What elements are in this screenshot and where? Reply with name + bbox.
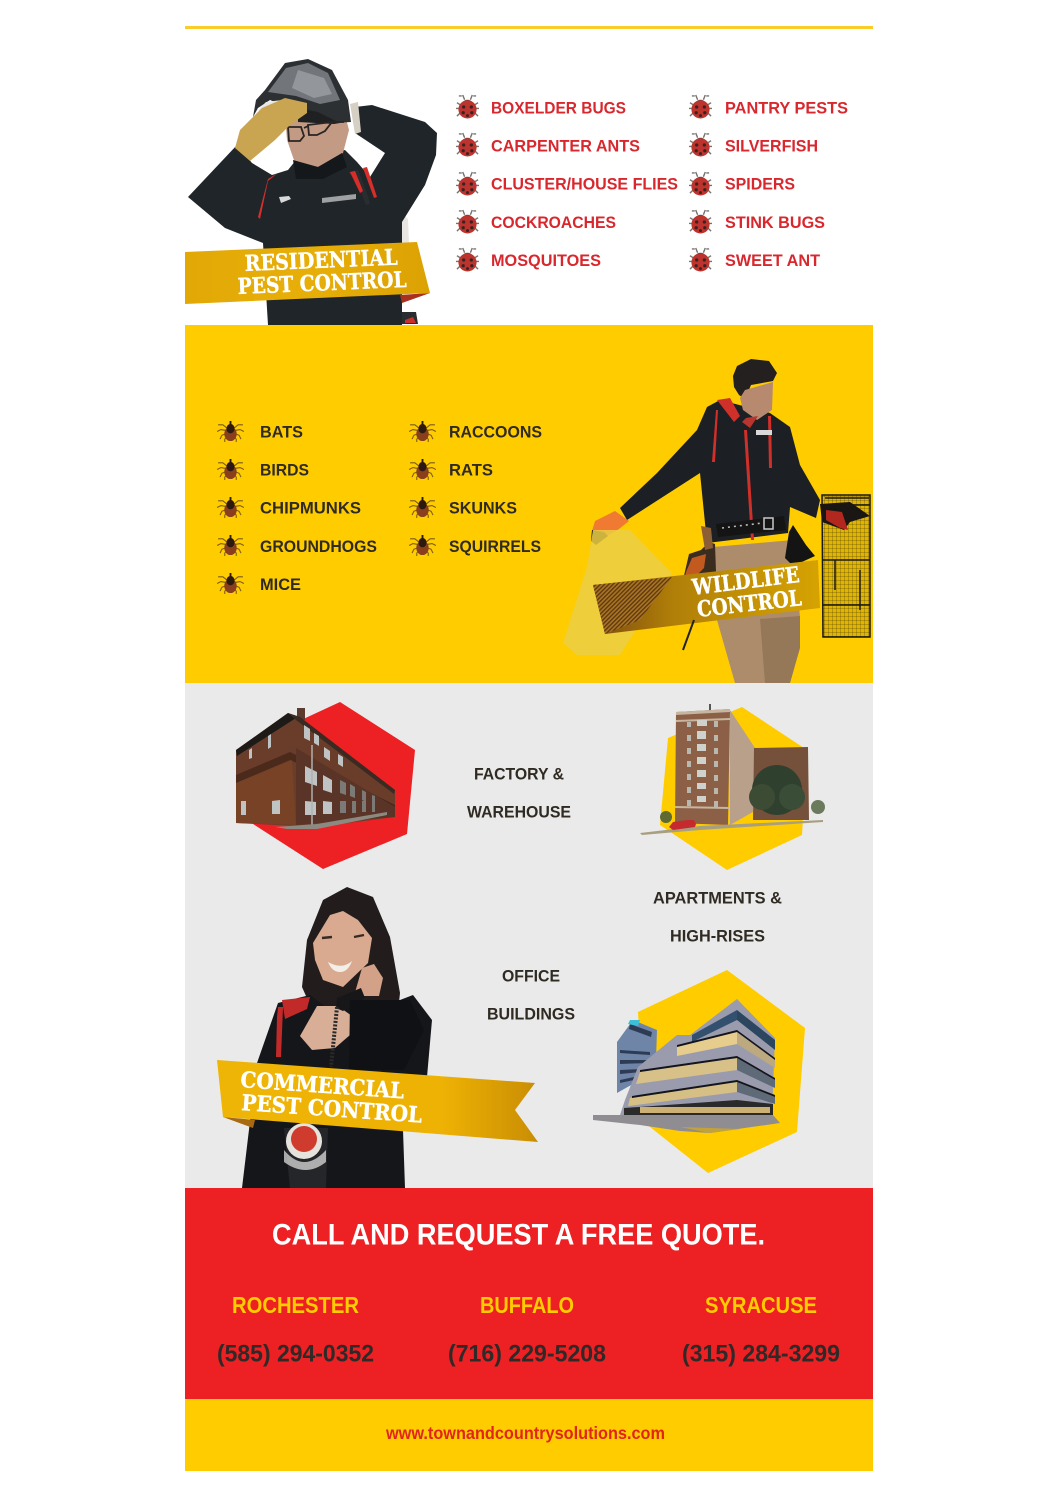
item: sweet ant — [689, 248, 821, 271]
item: stink bugs: STINK BUGS — [725, 213, 825, 232]
item: birds — [217, 459, 309, 480]
image: office building — [593, 999, 780, 1133]
label: apartments and high-rises: APARTMENTS & — [653, 888, 782, 908]
contact: buffalo — [448, 1292, 606, 1368]
ribbon: commercial pest control: COMMERCIAL — [240, 1067, 405, 1104]
item: pantry pests: PANTRY PESTS — [725, 98, 848, 118]
contact: rochester: (585) 294-0352 — [217, 1340, 374, 1368]
item: rats: RATS — [449, 460, 493, 480]
item: raccoons: RACCOONS — [449, 422, 542, 442]
ribbon: wildlife control: WILDLIFE — [690, 562, 801, 601]
item: cockroaches: COCKROACHES — [491, 213, 616, 232]
ribbon: commercial pest control: PEST CONTROL — [241, 1090, 423, 1129]
ribbon: residential pest control: PEST CONTROL — [237, 267, 407, 300]
label: office buildings: BUILDINGS — [487, 1004, 575, 1024]
panel: commercial pest control background — [185, 683, 873, 1188]
item: boxelder bugs — [456, 95, 626, 118]
item: stink bugs — [689, 210, 825, 233]
label: factory and warehouse: WAREHOUSE — [467, 802, 571, 822]
ribbon: commercial pest control — [217, 1060, 538, 1142]
photo: woman on telephone — [242, 887, 432, 1188]
item: pantry pests — [689, 95, 848, 118]
item: mosquitoes — [456, 248, 601, 271]
label: apartments and high-rises — [653, 888, 782, 946]
pest list: left column — [456, 95, 678, 271]
contact: rochester — [217, 1292, 374, 1368]
contact: syracuse: SYRACUSE — [705, 1292, 817, 1318]
photo: technician with visor — [188, 59, 437, 325]
wildlife list: left column — [217, 421, 377, 594]
ribbon: wildlife control: CONTROL — [696, 585, 803, 623]
item: cluster/house flies: CLUSTER/HOUSE FLIES — [491, 174, 678, 194]
item: chipmunks — [217, 497, 361, 518]
label: factory and warehouse — [467, 764, 571, 822]
top rule — [185, 26, 873, 29]
ribbon: residential pest control: RESIDENTIAL — [244, 245, 398, 277]
item: squirrels: SQUIRRELS — [449, 537, 541, 556]
label: office buildings — [487, 966, 575, 1024]
item: spiders — [689, 172, 795, 195]
item: bats — [217, 421, 303, 442]
heading: call and request a free quote: CALL AND REQUEST A FREE QUOTE. — [272, 1218, 765, 1252]
item: groundhogs: GROUNDHOGS — [260, 537, 377, 556]
label: apartments and high-rises: HIGH-RISES — [670, 926, 765, 946]
item: cluster/house flies — [456, 172, 678, 195]
item: silverfish: SILVERFISH — [725, 136, 818, 156]
item: spiders: SPIDERS — [725, 174, 795, 194]
item: cockroaches — [456, 210, 616, 233]
contact: buffalo: (716) 229-5208 — [448, 1340, 606, 1368]
hexagon: apartments — [660, 707, 807, 870]
ribbon: residential pest control — [185, 242, 430, 304]
panel: residential pest control — [185, 59, 437, 325]
contact: rochester: ROCHESTER — [232, 1292, 359, 1318]
panel: wildlife control background — [185, 325, 873, 683]
ribbon: wildlife control — [593, 560, 820, 650]
panel: website footer — [185, 1399, 873, 1471]
panel: call to action — [185, 1188, 873, 1399]
image: apartment building — [640, 704, 825, 835]
label: factory and warehouse: FACTORY & — [474, 764, 564, 784]
item: groundhogs — [217, 535, 377, 556]
item: skunks: SKUNKS — [449, 498, 517, 518]
item: mice — [217, 573, 301, 594]
item: carpenter ants — [456, 133, 640, 156]
item: bats: BATS — [260, 422, 303, 442]
item: silverfish — [689, 133, 818, 156]
item: sweet ant: SWEET ANT — [725, 251, 821, 270]
contact: syracuse — [682, 1292, 840, 1368]
photo: wildlife technician with net and cage — [591, 359, 820, 683]
item: chipmunks: CHIPMUNKS — [260, 498, 361, 518]
contact: syracuse: (315) 284-3299 — [682, 1340, 840, 1368]
label: office buildings: OFFICE — [502, 966, 560, 986]
item: carpenter ants: CARPENTER ANTS — [491, 136, 640, 156]
item: mosquitoes: MOSQUITOES — [491, 251, 601, 270]
item: mice: MICE — [260, 575, 301, 594]
website url: www.townandcountrysolutions.com — [385, 1423, 665, 1443]
pest list: right column — [689, 95, 848, 271]
wildlife list: right column — [409, 421, 542, 556]
contact: buffalo: BUFFALO — [480, 1292, 574, 1318]
icon: wire animal cage — [820, 495, 870, 637]
hexagon: office — [638, 970, 805, 1173]
item: birds: BIRDS — [260, 460, 309, 480]
icon: animal net — [563, 530, 672, 655]
hexagon: factory — [250, 702, 415, 869]
image: brick factory — [236, 708, 395, 829]
item: boxelder bugs: BOXELDER BUGS — [491, 98, 626, 118]
